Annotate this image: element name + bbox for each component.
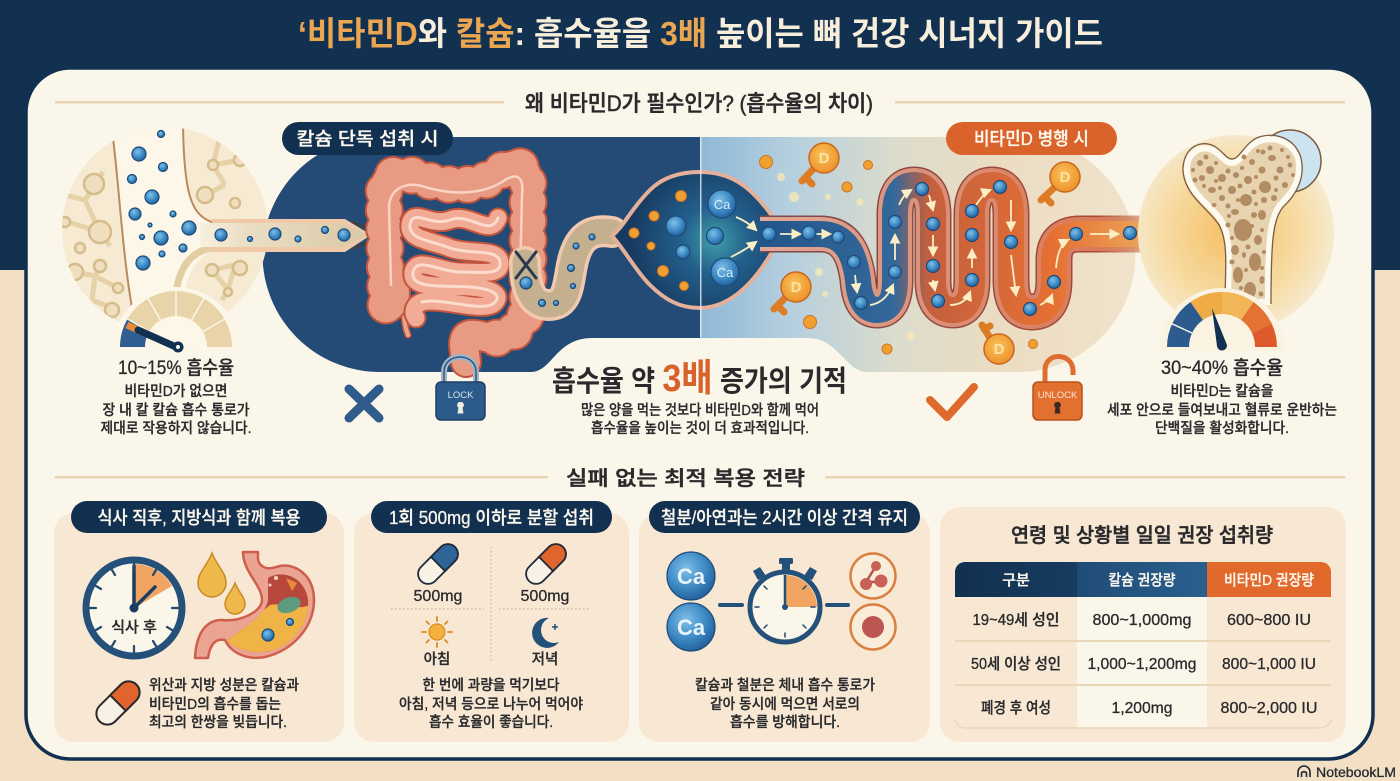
text: meal tip [149, 677, 299, 731]
text: miracle explanation: 많은 양을 먹는 것보다 비타민D와 함께 먹어 [581, 402, 819, 419]
pill label: iron and zinc interval: 철분/아연과는 2시간 이상 간격 유지 [661, 508, 908, 528]
pill label: after a meal [71, 501, 327, 533]
text: interval tip: 칼슘과 철분은 체내 흡수 통로가 [695, 677, 875, 694]
illustration: intestinal wall without vitamin D [62, 128, 268, 322]
icon: capsule [92, 677, 144, 729]
icon: stomach [195, 552, 314, 658]
icon: calcium spheres: Ca [677, 615, 706, 640]
icon: orange capsule [522, 540, 570, 588]
text: miracle explanation: 흡수율을 높이는 것이 더 효과적입니다. [591, 420, 809, 437]
pill label: after a meal: 식사 직후, 지방식과 함께 복용 [98, 508, 300, 528]
icon: clock [86, 560, 182, 656]
icon: clock: 식사 후 [111, 619, 157, 636]
time labels: 아침 [424, 651, 450, 668]
gauge: 10-15 percent absorption [112, 287, 240, 352]
calcium ions in bulb: Ca [714, 197, 731, 212]
icon: check mark [930, 387, 974, 417]
icon: lock [436, 357, 485, 420]
dose labels [414, 588, 569, 605]
icon: unlock: UNLOCK [1038, 390, 1078, 401]
text: dose tip: 아침, 저녁 등으로 나누어 먹어야 [399, 696, 583, 713]
icon: unlock [1033, 356, 1082, 420]
text: without vitamin D: 비타민D가 없으면 [124, 383, 228, 400]
dose labels: 500mg [521, 588, 569, 605]
small intestine tube to colon [200, 219, 378, 252]
section heading: why vitamin D: 왜 비타민D가 필수인가? (흡수율의 차이) [525, 91, 873, 116]
icon: calcium spheres [667, 552, 715, 651]
vitamin D keys and particles: D [1060, 169, 1071, 186]
pill label: with vitamin D [946, 122, 1117, 155]
icon: zinc sphere [850, 604, 896, 650]
table: intake by age: 칼슘 권장량 [1108, 572, 1176, 589]
panel: with vitamin D, gradient background [700, 137, 1136, 372]
panel: take right after a meal [54, 501, 344, 742]
icon: blue capsule [414, 540, 462, 588]
dotted dividers [391, 547, 591, 663]
table: intake by age: 600~800 IU [1227, 612, 1311, 629]
table: intake by age: 1,200mg [1112, 700, 1172, 717]
pill label: split doses: 1회 500mg 이하로 분할 섭취 [389, 508, 594, 528]
vitamin D keys and particles: D [994, 341, 1005, 358]
text: meal tip: 최고의 한쌍을 빚듭니다. [149, 714, 287, 731]
panel: iron and zinc interval [639, 501, 930, 742]
pill label: iron and zinc interval [649, 501, 920, 533]
table: intake by age: 1,000~1,200mg [1088, 656, 1196, 673]
text: interval tip: 흡수를 방해합니다. [730, 714, 840, 731]
heading: daily intake: 연령 및 상황별 일일 권장 섭취량 [1011, 524, 1273, 547]
heading: 3x absorption miracle: 흡수율 약 3배 증가의 기적 [552, 358, 847, 400]
icon: oil drops [198, 553, 245, 614]
table: intake by age: 50세 이상 성인 [971, 655, 1061, 673]
pill label: calcium alone: 칼슘 단독 섭취 시 [296, 129, 438, 149]
text: without vitamin D: 장 내 칼 칼슘 흡수 통로가 [102, 402, 250, 419]
pill label: with vitamin D: 비타민D 병행 시 [974, 129, 1089, 149]
text: meal tip: 위산과 지방 성분은 칼슘과 [149, 677, 299, 694]
text: with vitamin D [1107, 357, 1337, 437]
illustration: winding absorption tube with vitamin D [731, 180, 1175, 316]
text: without vitamin D: 제대로 작용하지 않습니다. [100, 420, 252, 437]
NotebookLM mark: NotebookLM [1316, 765, 1396, 780]
table: intake by age: 19~49세 성인 [972, 611, 1060, 629]
table: intake by age: 800~2,000 IU [1220, 700, 1318, 717]
title: ‘비타민D와 칼슘: 흡수율을 3배 높이는 뼈 건강 시너지 가이드 [298, 15, 1103, 52]
vitamin D keys and particles: D [791, 279, 802, 296]
dashes linking icons [720, 603, 848, 607]
text: without vitamin D: 10~15% 흡수율 [118, 357, 234, 379]
table: intake by age: 800~1,000mg [1092, 612, 1192, 629]
time labels: 저녁 [532, 651, 558, 668]
dose labels: 500mg [414, 588, 462, 605]
panel: calcium alone, navy background [262, 137, 700, 372]
icon: sun [422, 617, 452, 647]
blocked absorption tube with X [516, 231, 612, 306]
panel: split doses [354, 501, 629, 742]
gauge: 30-40 percent absorption [1159, 288, 1285, 351]
illustration: large and small intestine [370, 166, 528, 362]
icon: lock: LOCK [448, 390, 474, 401]
vitamin D keys and particles [760, 143, 1080, 364]
table: intake by age: 폐경 후 여성 [981, 699, 1051, 717]
text: meal tip: 비타민D의 흡수를 돕는 [149, 696, 281, 713]
pill label: calcium alone [282, 122, 453, 155]
vitamin D keys and particles: D [819, 150, 830, 167]
section heading: dosing strategy: 실패 없는 최적 복용 전략 [566, 467, 805, 490]
bulb containing calcium and vitamin D particles [612, 137, 772, 337]
text: dose tip [399, 677, 583, 731]
text: without vitamin D [100, 357, 252, 437]
calcium ions in bulb: Ca [717, 265, 734, 280]
table: intake by age [955, 562, 1331, 728]
icon: iron molecule [850, 554, 896, 598]
icon: calcium spheres: Ca [677, 564, 706, 589]
illustration: bone with glow [1138, 130, 1334, 331]
text: with vitamin D: 단백질을 활성화합니다. [1155, 420, 1289, 437]
table: intake by age: 구분 [1002, 572, 1030, 589]
text: with vitamin D: 30~40% 흡수율 [1161, 357, 1283, 379]
text: interval tip: 같아 동시에 먹으면 서로의 [710, 696, 860, 713]
icon: stopwatch [750, 558, 820, 642]
text: miracle explanation [581, 402, 819, 437]
panel: daily recommended intake [940, 507, 1346, 742]
text: interval tip [695, 677, 875, 731]
text: with vitamin D: 비타민D는 칼슘을 [1170, 383, 1274, 400]
table: intake by age: 비타민D 권장량 [1224, 572, 1314, 589]
icon: moon [532, 618, 559, 648]
text: with vitamin D: 세포 안으로 들여보내고 혈류로 운반하는 [1107, 402, 1337, 419]
text: dose tip: 흡수 효율이 좋습니다. [429, 714, 553, 731]
text: dose tip: 한 번에 과량을 먹기보다 [422, 677, 560, 694]
table: intake by age: 800~1,000 IU [1222, 656, 1316, 673]
calcium ions in bulb [706, 190, 739, 286]
icon: X mark [349, 389, 379, 418]
time labels [424, 651, 558, 668]
pill label: split doses [371, 501, 612, 533]
